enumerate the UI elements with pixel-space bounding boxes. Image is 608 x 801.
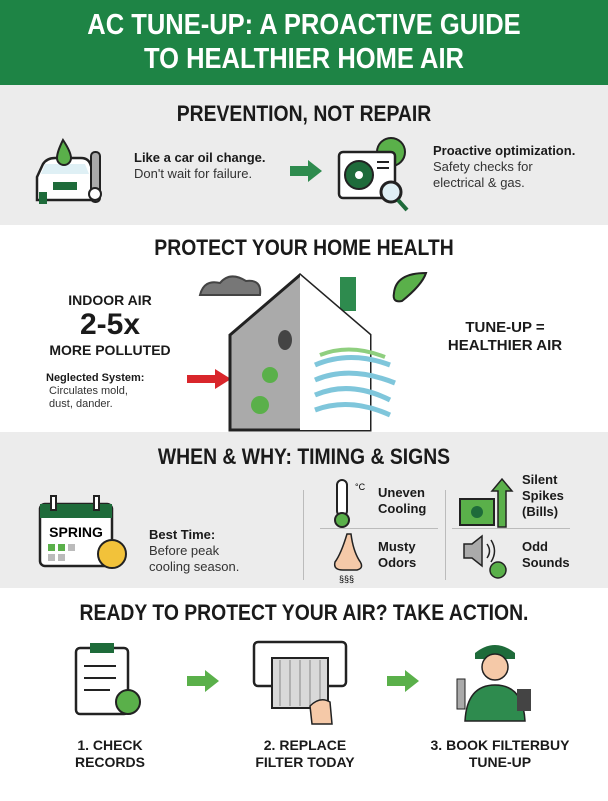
text: indoor air: MORE POLLUTED (49, 342, 171, 358)
text: proactive: Proactive optimization. (433, 143, 575, 158)
heading: prevention: PREVENTION, NOT REPAIR (177, 101, 431, 126)
header (0, 0, 608, 85)
text: best time: cooling season. (149, 559, 239, 574)
arrow 2 (387, 670, 419, 692)
text: car oil: Like a car oil change. (134, 150, 266, 165)
heading: home health: PROTECT YOUR HOME HEALTH (154, 235, 454, 260)
text: musty: Musty (378, 539, 416, 554)
icon: nose (334, 533, 362, 584)
text: tune-up: TUNE-UP = (465, 319, 545, 336)
icon: money (459, 478, 514, 528)
icon: nose: §§§ (339, 574, 354, 584)
text: step 1: RECORDS (75, 754, 145, 770)
text: neglected: Neglected System: (46, 372, 144, 384)
text: proactive (433, 143, 575, 190)
title: AC TUNE-UP: A PROACTIVE GUIDE (87, 9, 521, 41)
icon: house (198, 272, 428, 432)
text: step 1 (75, 737, 145, 770)
icon: car oil (36, 138, 102, 204)
text: step 1: 1. CHECK (77, 737, 143, 753)
icon: technician (456, 645, 531, 722)
text: proactive: electrical & gas. (433, 175, 525, 190)
text: spikes: Spikes (522, 488, 564, 503)
text: spikes (522, 472, 564, 519)
text: proactive: Safety checks for (433, 159, 533, 174)
text: musty (378, 539, 416, 570)
text: car oil (134, 150, 266, 181)
text: indoor air (49, 292, 171, 358)
title (87, 9, 521, 75)
icon: red arrow (187, 369, 228, 389)
panel: action (0, 588, 608, 801)
arrow 1 (187, 670, 219, 692)
icon: ac unit (338, 137, 408, 212)
text: tune-up: HEALTHIER AIR (448, 337, 562, 354)
text: step 3: TUNE-UP (469, 754, 531, 770)
heading: action: READY TO PROTECT YOUR AIR? TAKE ACTION. (80, 600, 528, 625)
text: step 3: 3. BOOK FILTERBUY (431, 737, 569, 753)
icon: speaker (463, 534, 507, 579)
text: tune-up (448, 319, 562, 354)
text: odd sounds (522, 539, 570, 570)
text: uneven: Cooling (378, 501, 426, 516)
text: best time: Best Time: (149, 527, 215, 542)
text: uneven: Uneven (378, 485, 425, 500)
text: spikes: (Bills) (522, 504, 558, 519)
panel: timing (0, 432, 608, 588)
text: car oil: Don't wait for failure. (134, 166, 252, 181)
text: odd sounds: Sounds (522, 555, 570, 570)
text: step 2: 2. REPLACE (264, 737, 346, 753)
text: spikes: Silent (522, 472, 557, 487)
panel: home health (0, 225, 608, 432)
text: neglected: dust, dander. (49, 398, 113, 410)
text: neglected (46, 372, 144, 410)
text: musty: Odors (378, 555, 416, 570)
icon: calendar (38, 495, 127, 569)
text: best time: Before peak (149, 543, 219, 558)
text: uneven (378, 485, 426, 516)
icon: thermometer: °C (355, 482, 366, 492)
icon: clipboard (74, 643, 141, 716)
text: neglected: Circulates mold, (49, 385, 128, 397)
panel: prevention (0, 85, 608, 225)
icon: filter (252, 640, 348, 725)
arrow (290, 160, 322, 182)
icon: calendar: SPRING (49, 524, 103, 540)
text: indoor air: INDOOR AIR (68, 292, 152, 308)
icon: thermometer (334, 479, 366, 528)
text: best time (149, 527, 239, 574)
text: step 2 (255, 737, 355, 770)
text: step 3 (430, 737, 570, 770)
text: step 2: FILTER TODAY (255, 754, 355, 770)
heading: timing: WHEN & WHY: TIMING & SIGNS (158, 444, 450, 469)
title: TO HEALTHIER HOME AIR (144, 43, 464, 75)
text: odd sounds: Odd (522, 539, 548, 554)
text: indoor air: 2-5x (80, 308, 140, 341)
